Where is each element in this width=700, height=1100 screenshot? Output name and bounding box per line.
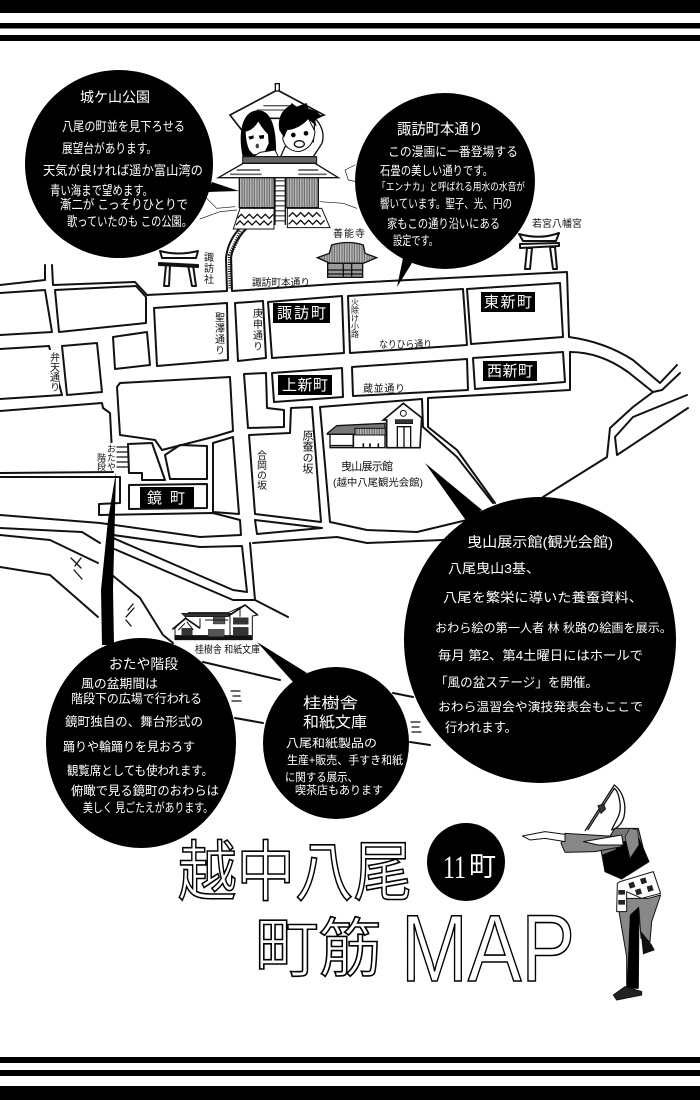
map labels: street and place names: 桂樹舎 和紙文庫 xyxy=(195,643,260,656)
badge: 11町: 町 xyxy=(469,852,496,882)
title: 越中八尾 町筋MAP: 町筋 xyxy=(255,913,382,985)
map labels: street and place names: 原蚕の坂 xyxy=(301,430,314,474)
street map road network xyxy=(0,227,688,745)
dancer torso xyxy=(601,828,649,879)
map labels: street and place names: 弁天通り xyxy=(48,351,60,392)
map labels: street and place names: 諏訪町本通り xyxy=(252,276,310,289)
tower railing and lower roof xyxy=(243,157,317,164)
callout: おたや階段: おたや階段 xyxy=(109,656,178,672)
callout: 城ケ山公園: 展望台があります。 xyxy=(62,141,157,156)
callout: 城ケ山公園 xyxy=(25,70,239,258)
callout: 桂樹舎 和紙文庫: 和紙文庫 xyxy=(303,714,367,731)
callout: 曳山展示館: 毎月 第2、第4土曜日にはホールで xyxy=(438,648,643,663)
badge: 11町: 11 xyxy=(443,850,466,886)
map labels: street and place names: (越中八尾観光会館) xyxy=(333,476,423,489)
callout: 桂樹舎 和紙文庫: 生産+販売、手すき和紙 xyxy=(287,753,403,767)
callout: 曳山展示館: 曳山展示館(観光会館) xyxy=(467,534,613,550)
callout: 曳山展示館 xyxy=(404,463,676,783)
callout: おたや階段: 鏡町独自の、舞台形式の xyxy=(65,714,203,729)
district label: 鏡町: 鏡町 xyxy=(147,490,185,507)
callout: おたや階段: 観覧席としても使われます。 xyxy=(67,763,213,778)
callout: 曳山展示館: 「風の盆ステージ」を開催。 xyxy=(435,675,598,690)
icon: zennoji temple xyxy=(317,242,377,277)
callout: おたや階段: 階段下の広場で行われる xyxy=(71,691,202,706)
title: 越中八尾 町筋MAP xyxy=(178,835,575,1002)
icon: suwa shrine torii xyxy=(159,251,198,286)
callout: おたや階段: 俯瞰で見る鏡町のおわらは xyxy=(71,783,219,798)
callout: おたや階段: 美しく 見ごたえがあります。 xyxy=(83,800,213,815)
callout: 曳山展示館: 八尾曳山3基、 xyxy=(448,561,540,576)
callout: 城ケ山公園: 漸二が こっそりひとりで xyxy=(60,197,188,212)
map labels: street and place names: 曳山展示館 xyxy=(341,460,393,473)
callout: 城ケ山公園: 歌っていたのも この公園。 xyxy=(67,214,192,229)
callout: 諏訪町本通り: 石畳の美しい通りです。 xyxy=(380,164,493,178)
callout: 曳山展示館: 行われます。 xyxy=(445,720,517,735)
district label: 諏訪町: 諏訪町 xyxy=(277,305,326,322)
icon: wakamiya torii xyxy=(519,233,559,269)
bottom border stripes xyxy=(0,1057,700,1100)
callout: 桂樹舎 和紙文庫: 八尾和紙製品の xyxy=(286,736,377,750)
stone base xyxy=(233,208,274,229)
badge: 11町 xyxy=(427,823,505,901)
map labels: street and place names: 若宮八幡宮 xyxy=(532,217,582,230)
callout: 曳山展示館: 八尾を繁栄に導いた養蚕資料、 xyxy=(443,590,643,605)
callout: おたや階段: 風の盆期間は xyxy=(81,677,158,691)
dancer legs xyxy=(619,895,661,988)
callout: 諏訪町本通り xyxy=(355,93,535,287)
callout: 桂樹舎 和紙文庫: 喫茶店もあります xyxy=(295,783,383,797)
map labels: street and place names: おたや xyxy=(106,444,116,471)
dancer hat xyxy=(585,785,625,831)
map labels: street and place names: 聖澤通り xyxy=(212,312,224,356)
callout: 諏訪町本通り: 響いています。聖子、光、円の xyxy=(380,197,512,211)
district label: 東新町: 東新町 xyxy=(484,294,532,311)
callout: 諏訪町本通り: 家もこの通り沿いにある xyxy=(387,217,500,231)
dancer sleeve and arms xyxy=(561,833,622,852)
upper roof xyxy=(230,90,324,130)
top border stripes xyxy=(0,0,700,41)
callout: 城ケ山公園: 八尾の町並を見下ろせる xyxy=(62,119,185,134)
dancer checked apron xyxy=(617,872,661,912)
title: 越中八尾 町筋MAP: MAP xyxy=(401,896,575,1002)
tower walls and stairs xyxy=(239,178,274,208)
icon: hikiyama museum building xyxy=(327,403,422,448)
decorative ticks and stairs near otaya steps xyxy=(71,447,421,732)
callout: 諏訪町本通り: 設定です。 xyxy=(393,234,438,248)
callout: 桂樹舎 和紙文庫: に関する展示、 xyxy=(285,771,358,784)
callout: 曳山展示館: おわら絵の第一人者 林 秋路の絵画を展示。 xyxy=(435,620,672,635)
callout: 諏訪町本通り: 諏訪町本通り xyxy=(397,121,483,138)
map labels: street and place names xyxy=(47,217,582,656)
illustration: owara dancer xyxy=(522,785,661,1000)
map labels: street and place names: なりひら通り xyxy=(379,339,432,351)
map labels: street and place names: 階段 xyxy=(96,453,106,472)
map labels: street and place names: 合岡の坂 xyxy=(254,449,266,491)
title: 越中八尾 町筋MAP: 越中八尾 xyxy=(178,835,412,909)
district label: 上新町: 上新町 xyxy=(282,377,328,394)
district label: 鏡町 xyxy=(140,487,194,508)
map labels: street and place names: 善能寺 xyxy=(333,227,365,240)
map labels: street and place names: 庚申通り xyxy=(250,307,262,352)
map labels: street and place names: 火除け小路 xyxy=(350,298,360,338)
girl character xyxy=(241,110,278,157)
callout: 曳山展示館: おわら温習会や演技発表会もここで xyxy=(438,700,643,714)
callout: おたや階段: 踊りや輪踊りを見おろす xyxy=(63,740,195,754)
callout: おたや階段 xyxy=(46,472,236,848)
callout: 城ケ山公園: 青い海まで望めます。 xyxy=(50,183,153,198)
icon: keijusha building xyxy=(172,605,258,640)
map labels: street and place names: 諏訪社 xyxy=(202,252,214,285)
icon: watchtower with two characters xyxy=(200,84,357,288)
callout: 桂樹舎 和紙文庫: 桂樹舎 xyxy=(303,695,358,712)
callout: 諏訪町本通り: 「エンナカ」と呼ばれる用水の水音が xyxy=(377,180,525,193)
hill stairs xyxy=(230,230,242,288)
callout: 諏訪町本通り: この漫画に一番登場する xyxy=(388,144,518,159)
map labels: street and place names: 蔵並通り xyxy=(363,382,405,395)
hills behind tower xyxy=(200,165,357,219)
callout: 城ケ山公園: 天気が良ければ遥か富山湾の xyxy=(43,163,203,178)
callout: 桂樹舎 和紙文庫 xyxy=(257,642,409,819)
boy character xyxy=(279,103,323,157)
district label: 西新町: 西新町 xyxy=(487,363,533,380)
callout: 城ケ山公園: 城ケ山公園 xyxy=(80,89,150,105)
